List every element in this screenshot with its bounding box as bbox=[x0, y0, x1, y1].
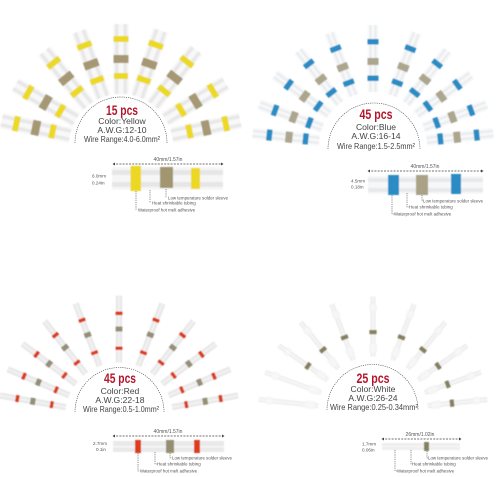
detail diagram: blue connector: Heat shrinkable tubing bbox=[409, 204, 453, 210]
spec text bbox=[330, 384, 418, 412]
spec text: Color:White bbox=[351, 384, 396, 394]
detail diagram: white connector: 0.06in bbox=[362, 448, 375, 452]
spec text bbox=[84, 116, 160, 144]
detail diagram: blue connector: 4.5mm bbox=[351, 178, 365, 184]
spec text: A.W.G:12-10 bbox=[97, 125, 147, 135]
detail diagram: white connector bbox=[362, 432, 489, 474]
detail diagram: red connector: Heat shrinkable tubing bbox=[157, 462, 201, 466]
fan of blue connectors bbox=[252, 25, 494, 146]
detail diagram: red connector: 40mm/1.57in bbox=[154, 429, 183, 435]
detail diagram: yellow connector: Low temperature solder sleeve bbox=[168, 196, 229, 200]
detail diagram: yellow connector: 6.0mm bbox=[92, 174, 106, 178]
spec text: A.W.G:26-24 bbox=[348, 393, 398, 403]
spec text: A.W.G:22-18 bbox=[95, 395, 145, 405]
spec text: Wire Range:1.5-2.5mm² bbox=[337, 141, 415, 151]
panel: white connectors bbox=[258, 296, 489, 474]
detail diagram: yellow connector: Heat shrinkable tubing bbox=[152, 200, 196, 206]
detail diagram: yellow connector: 40mm/1.57in bbox=[154, 157, 183, 163]
detail diagram: white connector: Heat shrinkable tubing bbox=[412, 462, 456, 466]
detail diagram: blue connector: Low temperature solder sleeve bbox=[423, 198, 484, 204]
spec text: Wire Range:4.0-6.0mm² bbox=[84, 134, 160, 144]
detail diagram: red connector bbox=[93, 429, 233, 474]
detail diagram: red connector: 2.7mm bbox=[93, 441, 107, 446]
fan of red connectors bbox=[0, 296, 239, 410]
spec text: A.W.G:16-14 bbox=[351, 131, 401, 141]
detail diagram: white connector: 26mm/1.02in bbox=[406, 432, 435, 438]
spec text: Color:Yellow bbox=[98, 116, 147, 126]
heading: 25 pcs: 25 pcs bbox=[356, 371, 390, 386]
detail diagram: red connector: Waterproof hot melt adhesive bbox=[140, 468, 198, 474]
heading: 15 pcs: 15 pcs bbox=[106, 103, 138, 118]
spec text: Color:Red bbox=[101, 386, 140, 396]
detail diagram: blue connector: 0.18in bbox=[351, 184, 364, 190]
panel: yellow connectors bbox=[0, 24, 242, 212]
fan of yellow connectors bbox=[0, 24, 242, 143]
spec text: Wire Range:0.25-0.34mm² bbox=[330, 402, 418, 412]
spec text bbox=[337, 122, 415, 151]
detail diagram: white connector: 1.7mm bbox=[362, 442, 376, 446]
detail diagram: white connector: Low temperature solder sleeve bbox=[428, 456, 489, 460]
dashed arc bbox=[75, 97, 167, 143]
detail diagram: blue connector: Waterproof hot melt adhesive bbox=[394, 212, 452, 216]
detail diagram: yellow connector: 0.24in bbox=[92, 180, 105, 186]
dashed arc bbox=[75, 368, 164, 412]
fan of white connectors bbox=[258, 296, 488, 410]
dashed arc bbox=[328, 103, 420, 149]
spec text: Wire Range:0.5-1.0mm² bbox=[83, 404, 159, 414]
panel: blue connectors bbox=[252, 25, 494, 216]
heading: 45 pcs: 45 pcs bbox=[360, 107, 392, 122]
spec text bbox=[83, 386, 159, 414]
detail diagram: blue connector: 40mm/1.57in bbox=[411, 164, 440, 170]
heading: 45 pcs: 45 pcs bbox=[104, 371, 136, 386]
detail diagram: yellow connector: Waterproof hot melt adhesive bbox=[138, 208, 196, 212]
dashed arc bbox=[327, 364, 418, 410]
detail diagram: red connector: 0.1in bbox=[96, 447, 106, 452]
spec text: Color:Blue bbox=[356, 122, 396, 132]
detail diagram: red connector: Low temperature solder sleeve bbox=[172, 456, 233, 460]
detail diagram: yellow connector bbox=[92, 157, 229, 212]
panel: red connectors bbox=[0, 296, 239, 474]
detail diagram: white connector: Waterproof hot melt adhesive bbox=[397, 468, 455, 474]
detail diagram: blue connector bbox=[351, 164, 484, 216]
